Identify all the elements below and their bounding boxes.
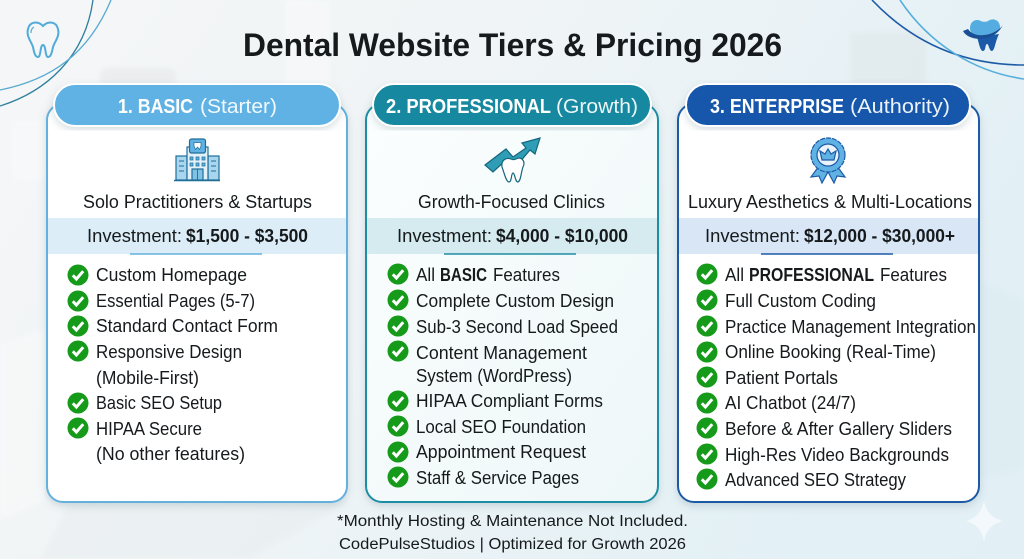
audience: professional: Growth-Focused Clinics bbox=[418, 192, 605, 212]
icon: award ribbon bbox=[811, 138, 845, 183]
icon: clinic building bbox=[174, 139, 220, 180]
price: basic bbox=[87, 226, 308, 246]
pill header: professional bbox=[373, 84, 651, 126]
panel: enterprise bbox=[678, 84, 979, 502]
icon: tooth outline bbox=[28, 23, 58, 57]
feature list: enterprise: Full Custom Coding bbox=[725, 291, 876, 311]
price: enterprise: $12,000 - $30,000+ bbox=[804, 226, 955, 246]
card body: professional bbox=[366, 104, 658, 502]
investment band: professional bbox=[367, 218, 657, 254]
price: enterprise bbox=[705, 226, 955, 246]
feature list: professional: Sub-3 Second Load Speed bbox=[416, 317, 618, 337]
feature list: professional: Local SEO Foundation bbox=[416, 417, 586, 437]
feature list: professional: Staff & Service Pages bbox=[416, 468, 579, 488]
feature list: professional: All bbox=[416, 265, 435, 285]
pill header: basic: 1. BASIC bbox=[118, 96, 193, 118]
feature list: basic bbox=[68, 264, 278, 464]
feature list: professional bbox=[388, 264, 618, 488]
feature list: enterprise: PROFESSIONAL bbox=[749, 265, 874, 285]
card body: enterprise bbox=[678, 104, 979, 502]
price: professional bbox=[397, 226, 628, 246]
feature list: enterprise: Online Booking (Real-Time) bbox=[725, 342, 936, 362]
pill header: enterprise: 3. ENTERPRISE bbox=[710, 96, 844, 118]
feature list: basic: Essential Pages (5-7) bbox=[96, 291, 255, 311]
footnote: *Monthly Hosting & Maintenance Not Included. bbox=[337, 513, 688, 530]
feature list: enterprise: High-Res Video Backgrounds bbox=[725, 445, 949, 465]
audience: enterprise: Luxury Aesthetics & Multi-Locations bbox=[688, 192, 972, 212]
pill header: professional: 2. PROFESSIONAL bbox=[386, 96, 551, 118]
feature list: basic: HIPAA Secure bbox=[96, 419, 202, 439]
feature list: basic: Basic SEO Setup bbox=[96, 393, 222, 413]
feature list: professional: Appointment Request bbox=[416, 442, 586, 462]
feature list: basic: (No other features) bbox=[96, 444, 245, 464]
feature list: enterprise: Patient Portals bbox=[725, 368, 838, 388]
feature list: basic: Responsive Design bbox=[96, 342, 242, 362]
card body: basic bbox=[47, 104, 347, 502]
feature list: professional: Content Management bbox=[416, 343, 587, 363]
feature list: professional: Features bbox=[493, 265, 560, 285]
price: basic: $1,500 - $3,500 bbox=[186, 226, 308, 246]
feature list: basic: Standard Contact Form bbox=[96, 316, 278, 336]
icon: growth arrow with tooth bbox=[485, 138, 540, 182]
pill header: basic: (Starter) bbox=[200, 96, 277, 118]
investment band: basic bbox=[48, 218, 346, 254]
price: professional: Investment: bbox=[397, 226, 492, 246]
icon: sparkle bbox=[966, 500, 1003, 542]
feature list: basic: Custom Homepage bbox=[96, 265, 247, 285]
audience: basic: Solo Practitioners & Startups bbox=[83, 192, 312, 212]
footer credit: CodePulseStudios | Optimized for Growth 2026 bbox=[339, 536, 686, 553]
title: Dental Website Tiers & Pricing 2026 bbox=[243, 27, 782, 63]
investment band: enterprise bbox=[679, 218, 978, 254]
price: basic: Investment: bbox=[87, 226, 182, 246]
price: professional: $4,000 - $10,000 bbox=[496, 226, 628, 246]
feature list: professional: System (WordPress) bbox=[416, 366, 572, 386]
pill header: enterprise: (Authority) bbox=[850, 96, 950, 118]
pill header: basic bbox=[54, 84, 340, 126]
icon: blue tooth logo bbox=[963, 19, 1003, 51]
feature list: professional: BASIC bbox=[440, 265, 487, 285]
feature list: enterprise: Before & After Gallery Sliders bbox=[725, 419, 952, 439]
feature list: enterprise: Practice Management Integration bbox=[725, 317, 976, 337]
feature list: enterprise: AI Chatbot (24/7) bbox=[725, 393, 856, 413]
feature list: basic: (Mobile-First) bbox=[96, 368, 199, 388]
pill header: professional: (Growth) bbox=[556, 96, 638, 118]
panel: professional bbox=[366, 84, 658, 502]
corner swooshes: top left bbox=[0, 0, 111, 106]
pill header: enterprise bbox=[686, 84, 970, 126]
panel: basic bbox=[47, 84, 347, 502]
price: enterprise: Investment: bbox=[705, 226, 800, 246]
feature list: enterprise: Advanced SEO Strategy bbox=[725, 470, 906, 490]
feature list: enterprise bbox=[696, 264, 976, 490]
feature list: enterprise: All bbox=[725, 265, 744, 285]
feature list: enterprise: Features bbox=[880, 265, 947, 285]
feature list: professional: Complete Custom Design bbox=[416, 291, 614, 311]
corner swooshes: top right bbox=[872, 0, 1024, 79]
feature list: professional: HIPAA Compliant Forms bbox=[416, 391, 603, 411]
